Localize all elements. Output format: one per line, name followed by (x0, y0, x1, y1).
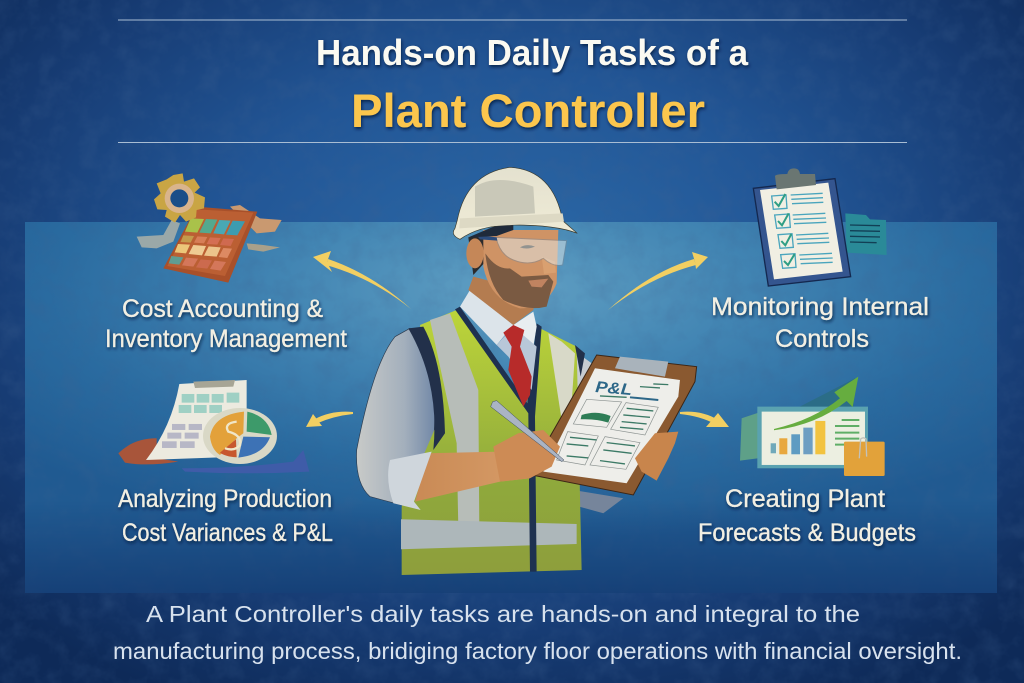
shirt sleeve (356, 328, 437, 510)
label: analyzing production: Analyzing Production (118, 485, 332, 513)
label: creating forecasts: Forecasts & Budgets (698, 519, 916, 547)
rolled cuff (388, 452, 432, 510)
forearm (415, 452, 530, 502)
vest bottom band (401, 519, 577, 549)
paper (543, 368, 680, 483)
eye (520, 245, 535, 249)
caption: A Plant Controller's daily tasks are hands-on and integral to the (146, 601, 860, 627)
hair (468, 230, 497, 275)
label: monitoring internal controls: Monitoring Internal (711, 293, 929, 321)
title block: Hands-on Daily Tasks of a (316, 32, 749, 73)
clip (615, 357, 668, 377)
label: creating forecasts: Creating Plant (725, 485, 885, 513)
head strap (468, 225, 513, 237)
label: cost accounting (105, 295, 347, 353)
neck (468, 277, 537, 325)
beard (485, 253, 553, 308)
label: cost accounting: Cost Accounting & (122, 295, 323, 323)
tie (503, 325, 532, 407)
label: monitoring internal controls (711, 293, 929, 353)
figure: plant controller (356, 167, 697, 575)
label: cost accounting: Inventory Management (105, 325, 347, 353)
writing hand (493, 430, 560, 482)
right lower sleeve (573, 490, 623, 513)
vest right reflective strip (548, 333, 575, 420)
icon: forecast chart (740, 377, 885, 476)
label: analyzing production (118, 485, 333, 547)
panel: central lighter band (25, 222, 997, 593)
title block (118, 20, 907, 142)
hard hat (453, 167, 577, 239)
pen (491, 401, 564, 462)
P&L heading: P&L (595, 379, 633, 399)
goggles (496, 237, 567, 265)
caption (113, 601, 962, 664)
icon: monitoring clipboard (753, 168, 887, 286)
label: monitoring internal controls: Controls (775, 325, 869, 353)
collar (460, 290, 513, 345)
ear (466, 238, 484, 268)
vest dark trim (455, 307, 542, 572)
vest left reflective strip (430, 313, 479, 528)
arrow: to forecasts (680, 412, 729, 427)
arrow: to cost accounting (313, 251, 411, 309)
form boxes (557, 399, 658, 469)
arrow: to variances (306, 412, 353, 427)
label: creating forecasts (698, 485, 916, 547)
title block: Plant Controller (351, 84, 705, 137)
clipboard (532, 355, 697, 495)
label: analyzing production: Cost Variances & P&L (122, 519, 333, 547)
icon: calculator with gear (137, 173, 282, 283)
head (483, 230, 558, 308)
arrow: to internal controls (608, 252, 708, 310)
caption: manufacturing process, bridiging factory floor operations with financial oversight. (113, 638, 962, 664)
vest base (402, 310, 582, 575)
right hand (635, 432, 678, 481)
icon: calendar and pie chart (118, 380, 309, 473)
